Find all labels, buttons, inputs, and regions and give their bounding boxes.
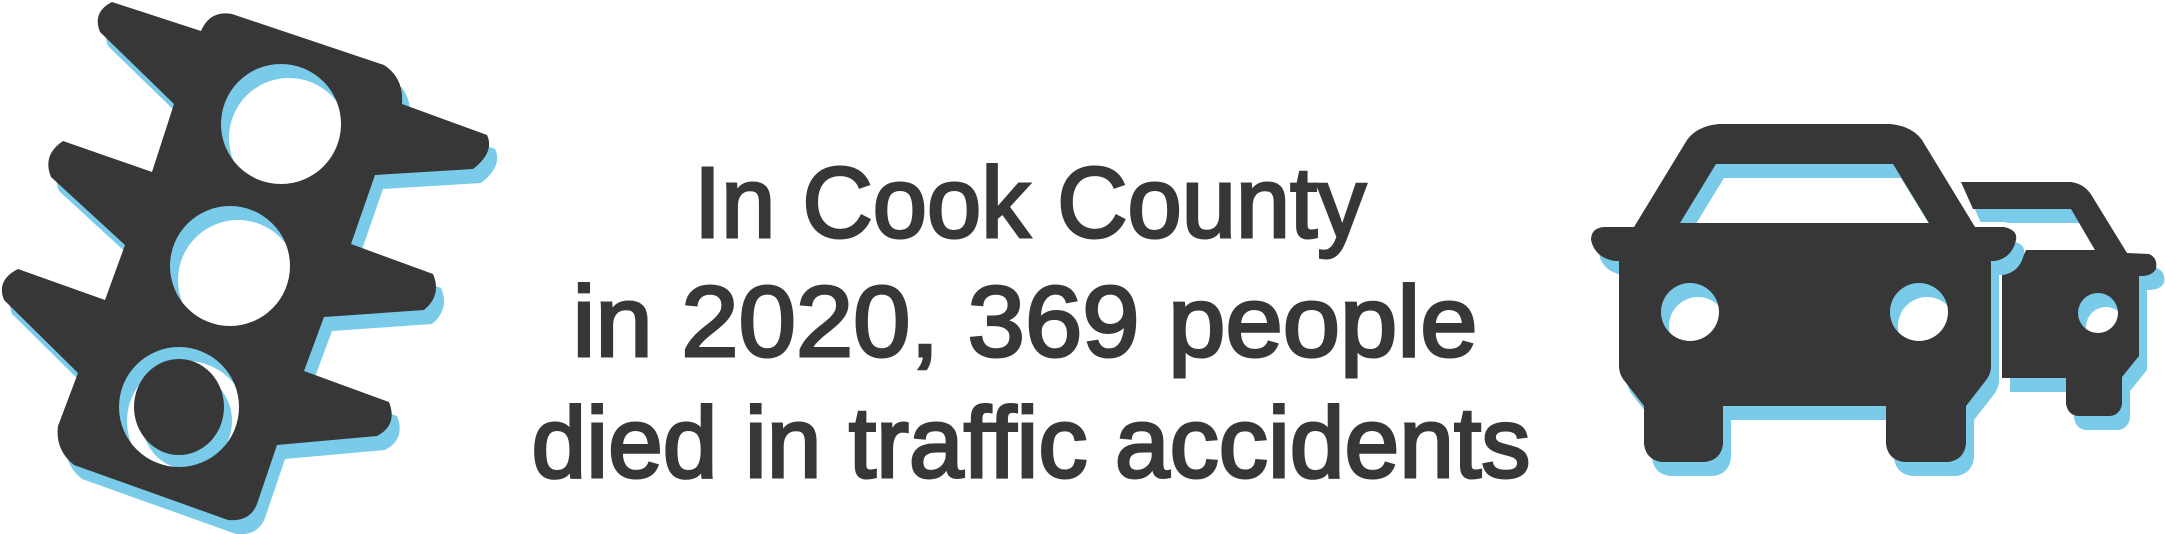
icon: traffic light: [2, 2, 497, 534]
icon: cars: [1591, 124, 2164, 476]
text line 2: in 2020, 369 people: [572, 266, 1478, 378]
text line 1: In Cook County: [694, 147, 1366, 259]
text line 3: died in traffic accidents: [532, 387, 1530, 499]
title text: [532, 147, 1530, 499]
